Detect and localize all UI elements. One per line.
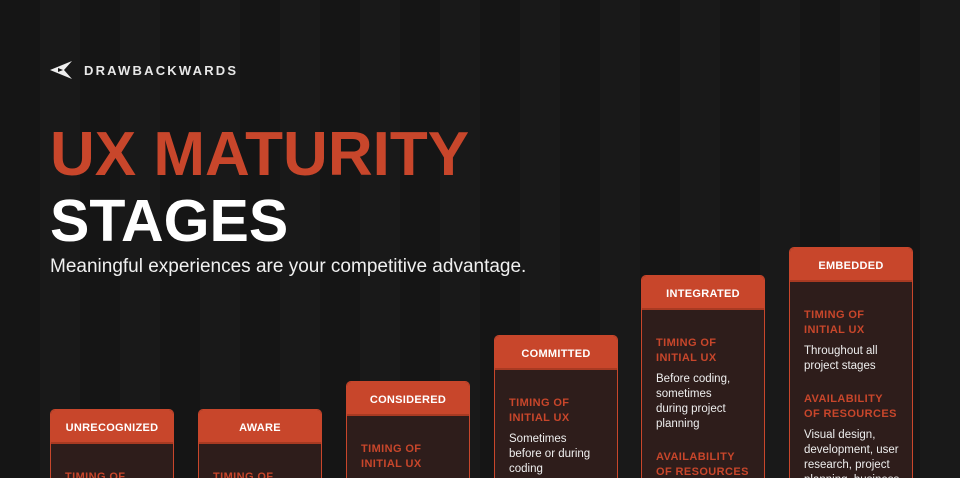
card: aware <box>198 409 322 478</box>
card: integrated: Before coding, sometimes during project planning <box>656 373 730 430</box>
logo <box>50 61 238 79</box>
title: UX MATURITY <box>50 120 469 189</box>
card: integrated: OF RESOURCES <box>656 466 749 478</box>
card: integrated: TIMING OF <box>656 337 716 349</box>
card: integrated <box>641 275 765 478</box>
card: integrated: AVAILABILITY <box>656 451 735 463</box>
card: considered: CONSIDERED <box>370 394 446 406</box>
card: embedded: TIMING OF <box>804 309 864 321</box>
card: embedded: OF RESOURCES <box>804 408 897 420</box>
card: unrecognized <box>50 409 174 478</box>
card: embedded: EMBEDDED <box>818 260 884 272</box>
card: embedded <box>789 247 913 478</box>
card: committed <box>494 335 618 478</box>
card: embedded: AVAILABILITY <box>804 393 883 405</box>
card: committed: TIMING OF <box>509 397 569 409</box>
card: embedded: INITIAL UX <box>804 324 865 336</box>
card: considered: INITIAL UX <box>361 458 422 470</box>
card: considered <box>346 381 470 478</box>
card: integrated: INTEGRATED <box>666 288 740 300</box>
logo: DRAWBACKWARDS <box>84 62 238 78</box>
card: committed: INITIAL UX <box>509 412 570 424</box>
card: considered: TIMING OF <box>361 443 421 455</box>
subtitle: Meaningful experiences are your competitive advantage. <box>50 256 526 277</box>
card: committed: COMMITTED <box>521 348 591 360</box>
card: aware: AWARE <box>239 422 281 434</box>
card: integrated: INITIAL UX <box>656 352 717 364</box>
card: committed: Sometimes before or during coding <box>509 433 590 475</box>
card: unrecognized: UNRECOGNIZED <box>66 422 158 434</box>
title line 2: STAGES <box>50 188 288 254</box>
card: embedded: Throughout all project stages <box>804 345 878 372</box>
